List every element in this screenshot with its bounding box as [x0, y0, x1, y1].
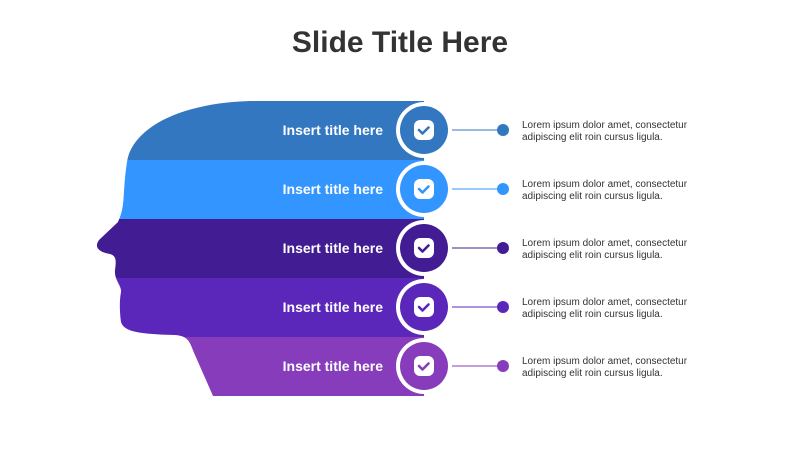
row 2 — [283, 161, 688, 217]
row 4 — [283, 279, 688, 335]
head silhouette bands — [80, 101, 430, 396]
row 4: Lorem ipsum dolor amet, consectetur — [522, 297, 688, 308]
infographic — [96, 30, 687, 396]
row 1: Lorem ipsum dolor amet, consectetur — [522, 120, 688, 131]
row 3: Insert title here — [283, 240, 383, 256]
row 4: Insert title here — [283, 299, 383, 315]
row 3 — [283, 220, 688, 276]
row 4: adipiscing elit roin cursus ligula. — [522, 309, 663, 320]
row 1: adipiscing elit roin cursus ligula. — [522, 132, 663, 143]
row 3: adipiscing elit roin cursus ligula. — [522, 250, 663, 261]
row 3: Lorem ipsum dolor amet, consectetur — [522, 238, 688, 249]
row 1 — [283, 102, 688, 158]
row 5: adipiscing elit roin cursus ligula. — [522, 368, 663, 379]
row 5: Lorem ipsum dolor amet, consectetur — [522, 356, 688, 367]
row 1: Insert title here — [283, 122, 383, 138]
row 5: Insert title here — [283, 358, 383, 374]
row 2: Insert title here — [283, 181, 383, 197]
title: Slide Title Here — [292, 26, 508, 59]
row 2: adipiscing elit roin cursus ligula. — [522, 191, 663, 202]
row 2: Lorem ipsum dolor amet, consectetur — [522, 179, 688, 190]
row 5 — [283, 338, 688, 394]
